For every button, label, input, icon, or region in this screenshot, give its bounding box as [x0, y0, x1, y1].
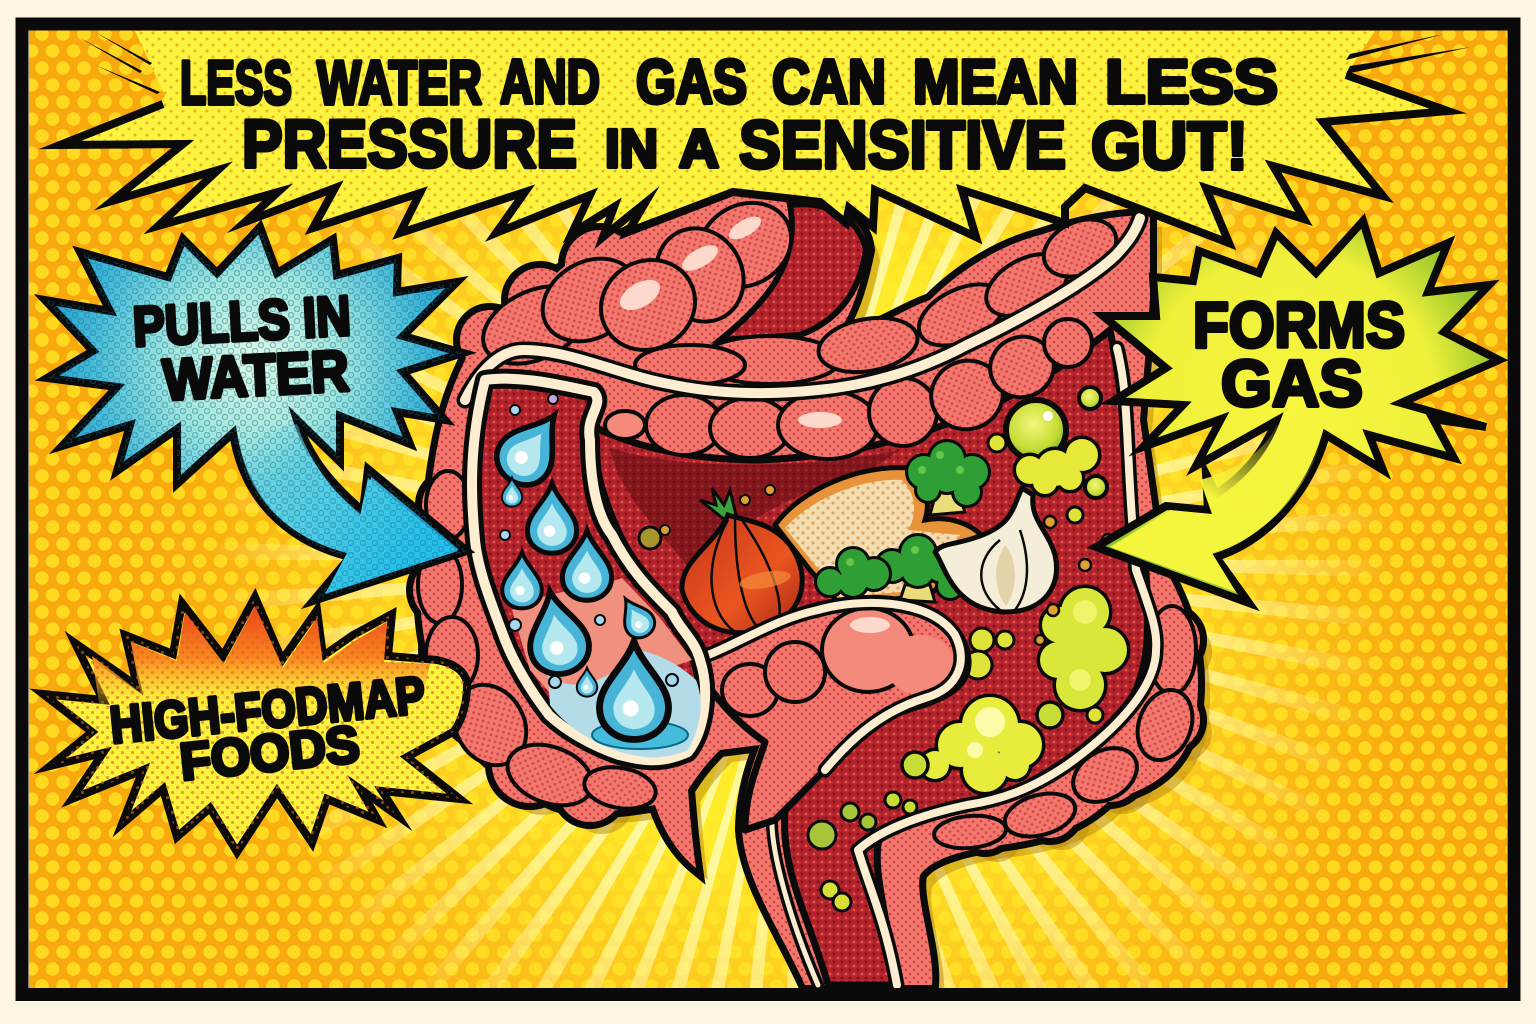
callout text	[1193, 289, 1405, 420]
callout text: GAS	[1221, 346, 1363, 420]
callout text: HIGH-FODMAP	[108, 666, 428, 755]
ascending colon with water	[472, 379, 705, 760]
colon end nub	[605, 411, 645, 439]
arrow highlight	[1110, 425, 1322, 592]
title text: A	[679, 119, 719, 179]
central cavity	[590, 330, 1148, 985]
title text: LESS	[180, 49, 292, 118]
back colon wedge	[720, 204, 866, 340]
lower transverse folds	[646, 319, 1092, 459]
small intestine loop	[688, 598, 968, 830]
callout text: FORMS	[1193, 289, 1405, 361]
cream lining: transverse	[465, 218, 1156, 985]
orange gradient top	[92, 606, 430, 710]
burst outline	[60, 75, 1448, 243]
title text: CAN	[772, 48, 886, 117]
dark cavity shadow	[610, 448, 900, 570]
title text	[180, 48, 1278, 184]
food: bread slice	[775, 468, 985, 605]
upper colon folds	[471, 186, 1125, 385]
callout text: FOODS	[177, 715, 362, 792]
sunburst rays	[225, 30, 1375, 988]
title text: LESS	[1105, 48, 1278, 117]
title text: AND	[500, 48, 600, 117]
title text: GUT!	[1091, 108, 1248, 184]
speed lines right	[1346, 34, 1471, 74]
title text: IN	[605, 119, 658, 179]
illustration: large intestine	[413, 186, 1202, 985]
title text: MEAN	[913, 48, 1078, 117]
burst: title	[60, 31, 1471, 243]
gut shadow	[522, 227, 1212, 988]
title text: PRESSURE	[242, 106, 577, 182]
speed lines left	[80, 32, 160, 94]
callout: high-FODMAP foods	[43, 597, 467, 852]
callout text	[131, 284, 352, 413]
callout: forms gas with arrow	[1096, 221, 1499, 603]
outer wall lobes	[418, 471, 1202, 851]
title text: WATER	[317, 49, 482, 118]
food: broccoli	[817, 442, 988, 602]
callout text: PULLS IN	[131, 284, 352, 358]
callout: pulls in water with arrow	[45, 227, 467, 601]
gas: bubbles and clouds	[639, 387, 1127, 911]
callout text	[108, 666, 428, 792]
food: garlic	[935, 488, 1057, 612]
cream lining: right and rectum	[858, 348, 1156, 985]
title text: GAS	[636, 48, 747, 117]
icon: water drops	[487, 394, 678, 739]
callout text: WATER	[161, 338, 350, 413]
title text: SENSITIVE	[739, 107, 1066, 183]
arrow shading	[237, 424, 458, 594]
food: onion	[682, 488, 802, 633]
